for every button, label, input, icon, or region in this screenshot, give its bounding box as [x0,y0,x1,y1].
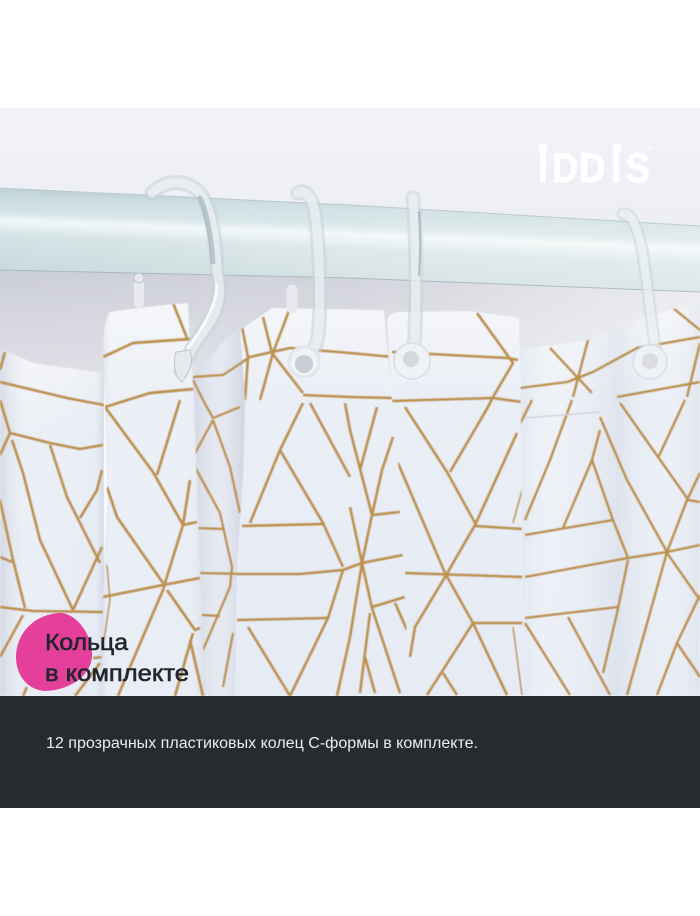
shower rod [0,188,700,292]
ring 2 [289,192,320,377]
curtain folds and gold pattern [0,300,700,696]
badge: pink blob with heading [16,613,189,691]
brand logo: IDDIS [538,146,650,192]
ring 3 [394,198,430,379]
heading text: Кольца [45,629,128,655]
dark caption band [0,696,700,808]
photo: curtain on rod [0,108,700,696]
transparent curtain rings [134,182,667,382]
ring 4 [623,214,667,379]
wall background [0,108,700,378]
panel: front fold with ring eyelet [378,305,525,696]
caption text: 12 прозрачных пластиковых колец С-формы в комплекте. [46,735,478,752]
infographic canvas [0,108,700,808]
heading text: в комплекте [45,660,189,686]
panel: left front fold [100,300,206,696]
pink blob [16,613,92,691]
brand logo: ® [648,144,654,153]
panel: inner shadow fold [190,320,250,696]
panel: right fold [517,300,700,696]
ring 1 [134,182,220,382]
panel: far left fold [0,340,106,696]
panel: center fold [223,305,415,696]
